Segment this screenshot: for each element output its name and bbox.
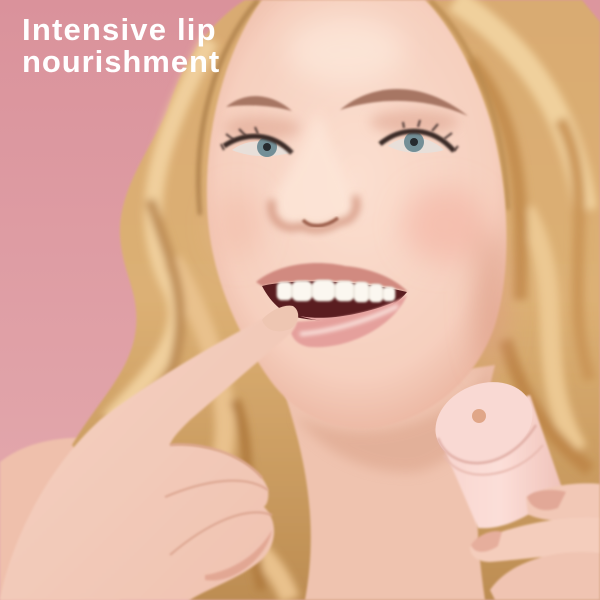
left hand with finger on lip <box>0 306 298 600</box>
cheek blush and forehead highlight <box>216 15 504 370</box>
eye sockets shadow <box>224 110 458 140</box>
title <box>22 12 220 79</box>
title: Intensive lip <box>22 12 217 47</box>
neck <box>285 365 495 600</box>
left shoulder <box>0 438 120 600</box>
teeth <box>277 280 395 302</box>
right hand fingers <box>470 483 600 600</box>
lip balm stick <box>423 368 562 528</box>
lips <box>256 263 408 347</box>
eyebrows <box>226 89 468 116</box>
left eye <box>221 127 292 157</box>
face <box>207 0 506 429</box>
neck shadow <box>295 365 495 472</box>
right eye <box>380 120 458 153</box>
title: nourishment <box>22 44 220 79</box>
nose <box>271 110 357 233</box>
top right background corner <box>582 0 600 22</box>
